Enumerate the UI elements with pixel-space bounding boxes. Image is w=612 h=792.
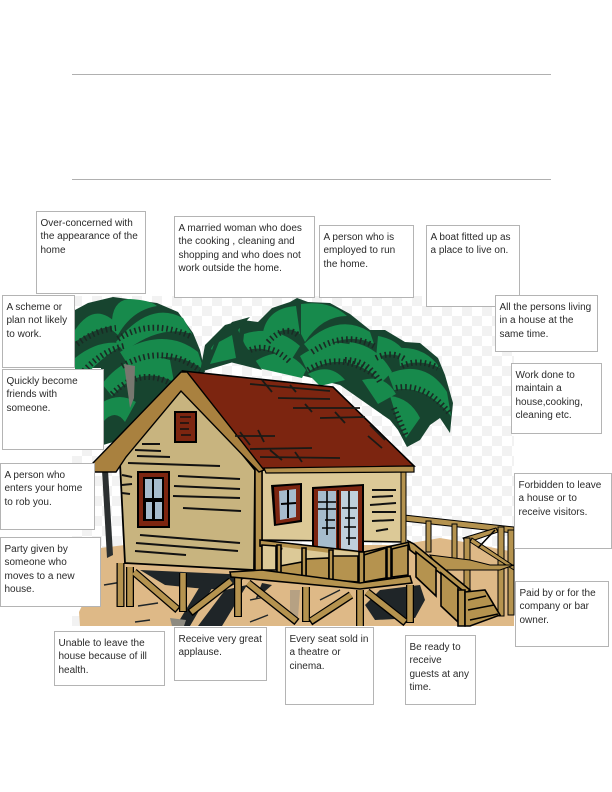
right tree frond hatching <box>246 331 450 436</box>
definition box: housework: house,cooking, <box>516 397 583 408</box>
grey sand marks <box>170 590 300 626</box>
definition box: housewarming: house. <box>4 584 35 595</box>
definition box: open house: time. <box>410 682 431 693</box>
definition box: house of cards: plan not likely <box>6 315 67 326</box>
definition box: get on like a house on fire: someone. <box>6 403 50 414</box>
definition box: housework <box>511 363 602 434</box>
definition box: house of cards: A scheme or <box>6 302 62 313</box>
definition box: open house <box>405 635 476 705</box>
definition box: housebreaker: A person who <box>4 470 65 481</box>
gable window <box>174 411 197 443</box>
definition box: household: same time. <box>500 329 548 340</box>
definition box: bring the house down: Receive very great <box>178 634 262 645</box>
definition box: housekeeper: the home. <box>324 259 368 270</box>
definition box: housewarming: moves to a new <box>4 571 75 582</box>
right tree silhouette <box>200 298 453 447</box>
definition box: housewarming: Party given by <box>4 544 68 555</box>
definition box: housewife: work outside the home. <box>178 263 282 274</box>
roof <box>183 371 414 469</box>
definition box: house of cards: to work. <box>6 329 42 340</box>
beach shadows <box>140 570 425 626</box>
definition box: get on like a house on fire: Quickly become <box>6 376 78 387</box>
roof fascia <box>264 466 414 473</box>
definition box: houseboat <box>426 225 520 307</box>
definition box: houseboat: a place to live on. <box>430 245 508 256</box>
definition box: housebound: house because of ill <box>58 651 147 662</box>
definition box: housework: cleaning etc. <box>516 410 572 421</box>
left tree silhouette <box>75 297 205 445</box>
right wall window <box>271 483 302 526</box>
definition box: on the house <box>515 581 609 647</box>
definition box: bring the house down: applause. <box>178 647 222 658</box>
stilt fill <box>120 563 410 626</box>
definition box: get on like a house on fire <box>2 369 104 450</box>
definition box: housekeeper: employed to run <box>324 245 395 256</box>
beach sand <box>79 538 514 626</box>
palm tree left <box>75 297 205 445</box>
right tree fronds <box>210 303 451 438</box>
transparent checker background <box>72 296 514 626</box>
definition box: housework: maintain a <box>516 383 562 394</box>
definition box: open house: receive <box>410 655 442 666</box>
definition box: housewife: A married woman who does <box>178 223 302 234</box>
deck floor beam <box>230 570 412 589</box>
definition box: over-concerned: home <box>40 245 66 256</box>
definition box: housewife <box>174 216 315 298</box>
definition box: house of cards <box>2 295 75 368</box>
roof shingle marks <box>235 380 385 462</box>
definition box: housebound: Unable to leave the <box>58 638 145 649</box>
definition box: full house <box>285 627 374 705</box>
thin trunk behind house <box>102 470 113 558</box>
front deck railing <box>260 540 414 584</box>
definition box: housewife: the cooking , cleaning and <box>178 236 295 247</box>
left palm trunk <box>124 364 135 408</box>
definition box: on the house: Paid by or for the <box>520 588 596 599</box>
second answer line <box>72 179 551 180</box>
definition box: full house: Every seat sold in <box>290 634 368 645</box>
definition box: open house: Be ready to <box>410 642 461 653</box>
left wall of house <box>120 381 255 570</box>
definition box: housework: Work done to <box>516 370 575 381</box>
right wall of house <box>262 470 405 542</box>
definition box: over-concerned: the appearance of the <box>40 231 138 242</box>
definition box: on the house: company or bar <box>520 601 589 612</box>
definition box: housekeeper: A person who is <box>324 232 394 243</box>
definition box: housebreaker: enters your home <box>4 483 82 494</box>
left tree fronds <box>75 299 204 422</box>
stairs <box>408 541 500 626</box>
stilts and braces <box>120 563 410 626</box>
definition box: houseboat: A boat fitted up as <box>430 232 511 243</box>
left wall window <box>137 471 170 528</box>
back deck and railing <box>404 515 514 616</box>
definition box: housebound <box>54 631 165 686</box>
beach tufts <box>104 582 340 622</box>
definition box: housebreaker: to rob you. <box>4 497 52 508</box>
corner post <box>255 468 262 572</box>
definition box: over-concerned: Over-concerned with <box>40 218 133 229</box>
definition box: housewarming: someone who <box>4 557 67 568</box>
top answer line <box>72 74 551 75</box>
definition box: housebound: health. <box>58 665 89 676</box>
definition box: bring the house down <box>174 627 267 681</box>
definition box: housekeeper <box>319 225 414 298</box>
definition box: full house: cinema. <box>290 661 325 672</box>
right wall post <box>401 470 406 545</box>
siding lines <box>122 444 396 555</box>
palm tree right group <box>200 298 453 447</box>
definition box: household <box>495 295 598 352</box>
definition box: housewife: shopping and who does not <box>178 250 301 261</box>
french door <box>312 484 364 560</box>
spiky frond <box>204 317 262 370</box>
definition box: over-concerned <box>36 211 146 294</box>
gable trim <box>93 372 264 472</box>
definition box: household: in a house at the <box>500 315 573 326</box>
definition box: house arrest <box>514 473 612 549</box>
definition box: house arrest: receive visitors. <box>518 507 587 518</box>
definition box: full house: a theatre or <box>290 647 341 658</box>
left tree frond hatching <box>77 328 202 394</box>
definition box: open house: guests at any <box>410 669 469 680</box>
definition box: house arrest: Forbidden to leave <box>518 480 601 491</box>
definition box: house arrest: a house or to <box>518 493 577 504</box>
definition box: get on like a house on fire: friends with <box>6 389 57 400</box>
definition box: household: All the persons living <box>500 302 591 313</box>
definition box: housebreaker <box>0 463 95 530</box>
definition box: on the house: owner. <box>520 615 549 626</box>
definition box: housewarming <box>0 537 101 607</box>
